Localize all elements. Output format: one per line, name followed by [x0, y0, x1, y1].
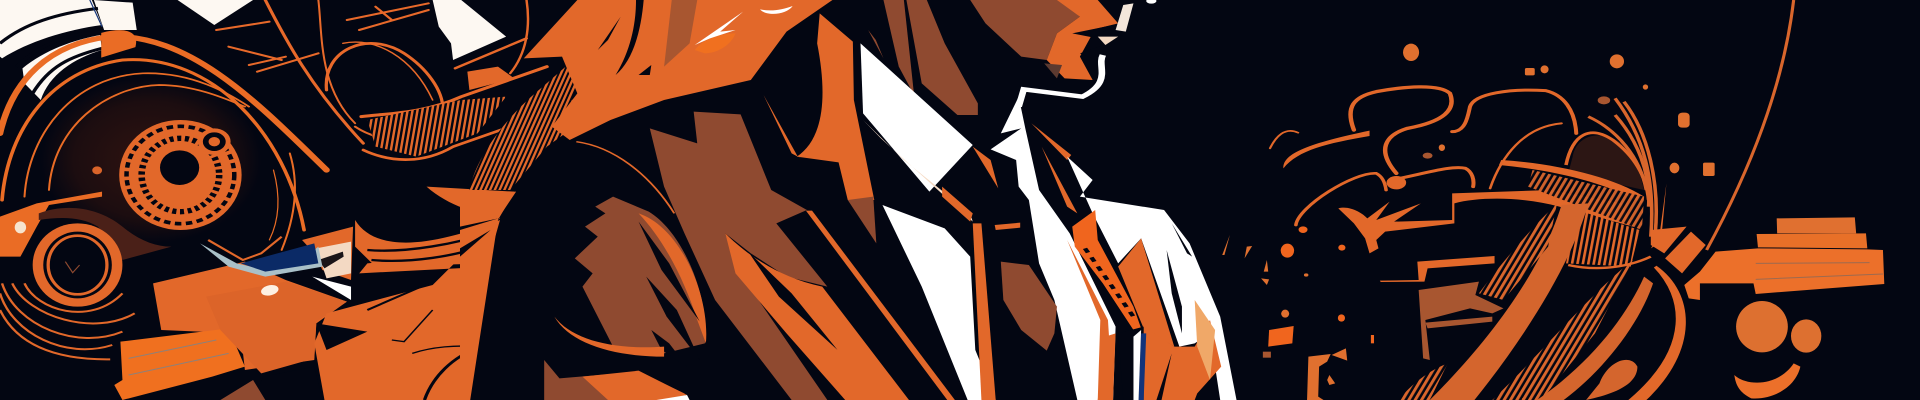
splash figure: [1338, 190, 1633, 253]
brown bottom left patch: [544, 360, 687, 400]
icon: smiling circles: [1734, 301, 1821, 398]
white chin line: [1019, 55, 1103, 107]
lapel line and brown wedge: [806, 211, 955, 400]
orange vertical band: [797, 13, 874, 200]
orange hair mass: [524, 0, 832, 140]
white flecks: [695, 12, 743, 45]
orange angle blocks: [1651, 183, 1687, 248]
stepped stroke: [1380, 256, 1495, 282]
right panel: abstract orange flourish: [1222, 0, 1884, 400]
dark glow disc: [41, 77, 261, 243]
big diagonal sash: [1430, 203, 1588, 400]
brown shoulder: [650, 112, 827, 400]
paper sheets bottom left: [114, 227, 353, 400]
white edge strip: [863, 120, 973, 222]
left panel: abstract machinery: [0, 0, 604, 400]
brown left arm patch: [575, 197, 706, 353]
right thin arc: [1707, 0, 1794, 250]
scattered dots: [1222, 44, 1715, 400]
arm slashes: [639, 222, 700, 367]
tie orange line: [973, 223, 996, 400]
brown tie shape: [1001, 262, 1057, 351]
right shoulder white: [1067, 157, 1237, 400]
orange flame with dark teeth: [1072, 210, 1141, 330]
orange sleeve strip: [725, 233, 909, 400]
hair shading: [460, 0, 651, 257]
brown ledger block: [1419, 282, 1503, 360]
face: [970, 0, 1156, 80]
centre panel: man in suit: [460, 0, 1237, 400]
orange block beneath the jacket edge: [314, 187, 514, 400]
white collar: [861, 43, 973, 192]
white bands top left: [0, 0, 506, 100]
neck and hair brown: [906, 0, 978, 115]
white collar right: [991, 97, 1116, 400]
dome with stripes: [1568, 135, 1644, 190]
stepped right block: [1684, 217, 1884, 300]
large curve sweeping down: [1631, 267, 1684, 400]
bottom dark fragment: [253, 367, 322, 400]
calligraphic strokes: [1270, 87, 1576, 225]
icon: lower-left ring: [33, 223, 122, 307]
orange dome lattice: [216, 0, 547, 160]
icon: ornate central disc: [119, 120, 242, 230]
orange concentric arcs: [0, 31, 327, 250]
orange wedge with lower ring: [0, 192, 102, 257]
concentric lower-left arcs: [0, 283, 135, 359]
sleeve slash: [748, 252, 838, 350]
white shirt front: [882, 205, 996, 400]
